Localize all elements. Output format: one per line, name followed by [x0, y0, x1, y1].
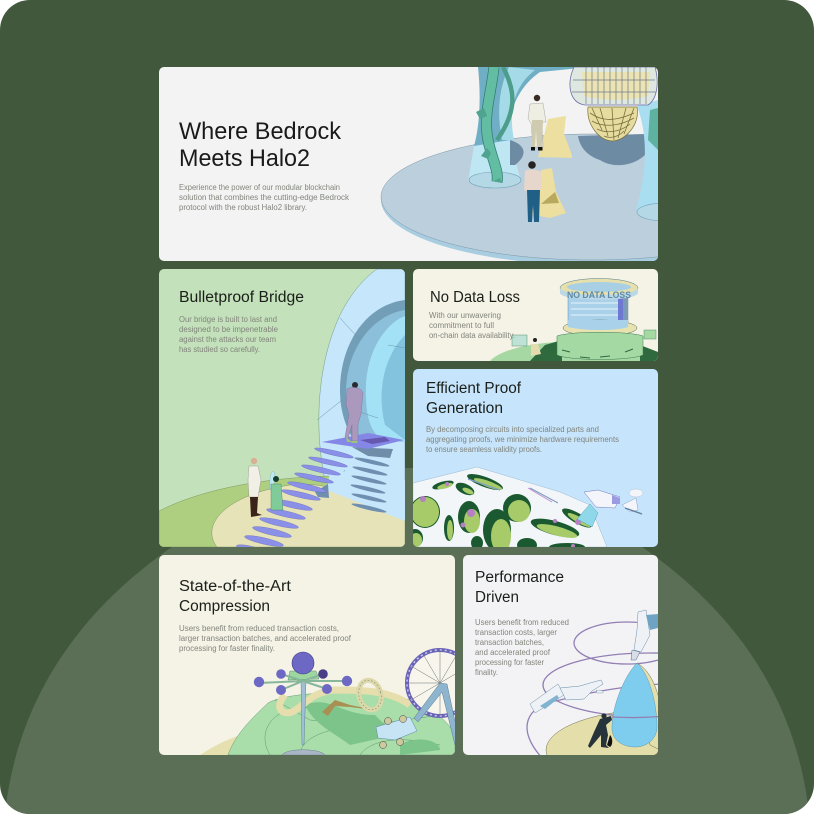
ferris wheel	[407, 650, 473, 745]
heading	[475, 569, 564, 606]
hero illustration: disc platform	[380, 134, 658, 261]
sand ground	[200, 731, 260, 755]
rings	[527, 622, 757, 760]
tower label: NO DATA LOSS	[567, 290, 631, 301]
heading: Compression	[179, 598, 270, 615]
body text: to ensure seamless validity proofs.	[426, 445, 542, 454]
body text: finality.	[475, 668, 498, 677]
heading: No Data Loss	[430, 289, 520, 306]
heading: Performance	[475, 569, 564, 586]
panel: state-of-the-art compression	[159, 555, 473, 755]
pushing man	[588, 713, 612, 748]
boat and small wheels	[376, 716, 417, 748]
stairs	[236, 446, 354, 555]
body text: commitment to full	[429, 321, 494, 330]
body text: transaction batches,	[475, 638, 544, 647]
sand path	[212, 484, 405, 547]
body text: Users benefit from reduced transaction costs,	[179, 624, 339, 633]
hero illustration: cage and pine cone	[570, 67, 657, 141]
left robot arm	[530, 680, 603, 713]
hero title: Meets Halo2	[179, 145, 310, 172]
body text: and accelerated proof	[475, 648, 551, 657]
panel: efficient proof generation	[407, 369, 658, 553]
blue overlap at portal base	[327, 470, 405, 521]
body text: on-chain data availability.	[429, 331, 515, 340]
hero illustration: cone shadow	[578, 134, 645, 165]
person in lilac	[345, 382, 363, 443]
hero illustration: chair back	[538, 116, 572, 158]
body text: processing for faster finality.	[179, 644, 275, 653]
heading: Bulletproof Bridge	[179, 289, 304, 306]
body text: larger transaction batches, and accelerated proof	[179, 634, 352, 643]
body text: has studied so carefully.	[179, 345, 260, 354]
background arch	[5, 468, 809, 814]
panel: hero	[159, 67, 658, 261]
doctor	[248, 458, 262, 517]
green figure	[270, 471, 283, 510]
heading	[426, 382, 522, 413]
portal illustration	[317, 269, 405, 480]
ground hill	[490, 342, 660, 361]
body text: Users benefit from reduced	[475, 618, 569, 627]
body text	[475, 618, 569, 677]
heading: Driven	[475, 589, 519, 606]
green hill	[228, 693, 455, 755]
heading: State-of-the-Art	[179, 578, 292, 595]
lattice illustration	[407, 467, 607, 553]
body text	[429, 311, 515, 340]
hero description: protocol with the robust Halo2 library.	[179, 203, 307, 212]
desk and person	[512, 330, 656, 356]
body text: aggregating proofs, we minimize hardware requirements	[426, 435, 619, 444]
platform	[322, 433, 404, 458]
body text: With our unwavering	[429, 311, 501, 320]
hero illustration: left column with vine	[468, 67, 574, 188]
body text: designed to be impenetrable	[179, 325, 278, 334]
body text: Our bridge is built to last and	[179, 315, 277, 324]
body text: By decomposing circuits into specialized parts and	[426, 425, 599, 434]
body text: processing for faster	[475, 658, 544, 667]
ground	[159, 476, 340, 547]
hero illustration: right column	[636, 100, 658, 221]
panel: performance driven	[463, 555, 778, 791]
tower illustration	[557, 278, 643, 360]
hero title	[179, 122, 341, 166]
hero illustration: man in white	[528, 95, 546, 150]
body text	[179, 624, 352, 653]
body text	[179, 315, 278, 354]
hero description: Experience the power of our modular blockchain	[179, 183, 340, 192]
panel: bulletproof bridge	[159, 269, 405, 555]
robot hand	[577, 489, 643, 527]
track	[280, 690, 410, 713]
panel: no data loss	[413, 269, 660, 361]
dark wedge at portal base	[315, 484, 329, 498]
carousel tower	[254, 652, 352, 755]
heading: Generation	[426, 400, 503, 417]
cream disc	[546, 709, 778, 791]
top robot arm	[631, 610, 658, 660]
heading	[179, 578, 292, 615]
hill contours	[265, 700, 440, 755]
hero description	[179, 183, 349, 212]
body text: transaction costs, larger	[475, 628, 557, 637]
heading: Efficient Proof	[426, 380, 522, 397]
stair shadows	[350, 456, 390, 514]
hero illustration: front chair	[532, 168, 566, 218]
loop	[355, 678, 385, 712]
front ring	[612, 716, 665, 718]
hero illustration: man in jeans	[524, 161, 541, 222]
cone	[612, 663, 662, 750]
hero description: solution that combines the cutting-edge Bedrock	[179, 193, 349, 202]
hero title: Where Bedrock	[179, 118, 342, 145]
body text: against the attacks our team	[179, 335, 276, 344]
body text	[426, 425, 619, 454]
